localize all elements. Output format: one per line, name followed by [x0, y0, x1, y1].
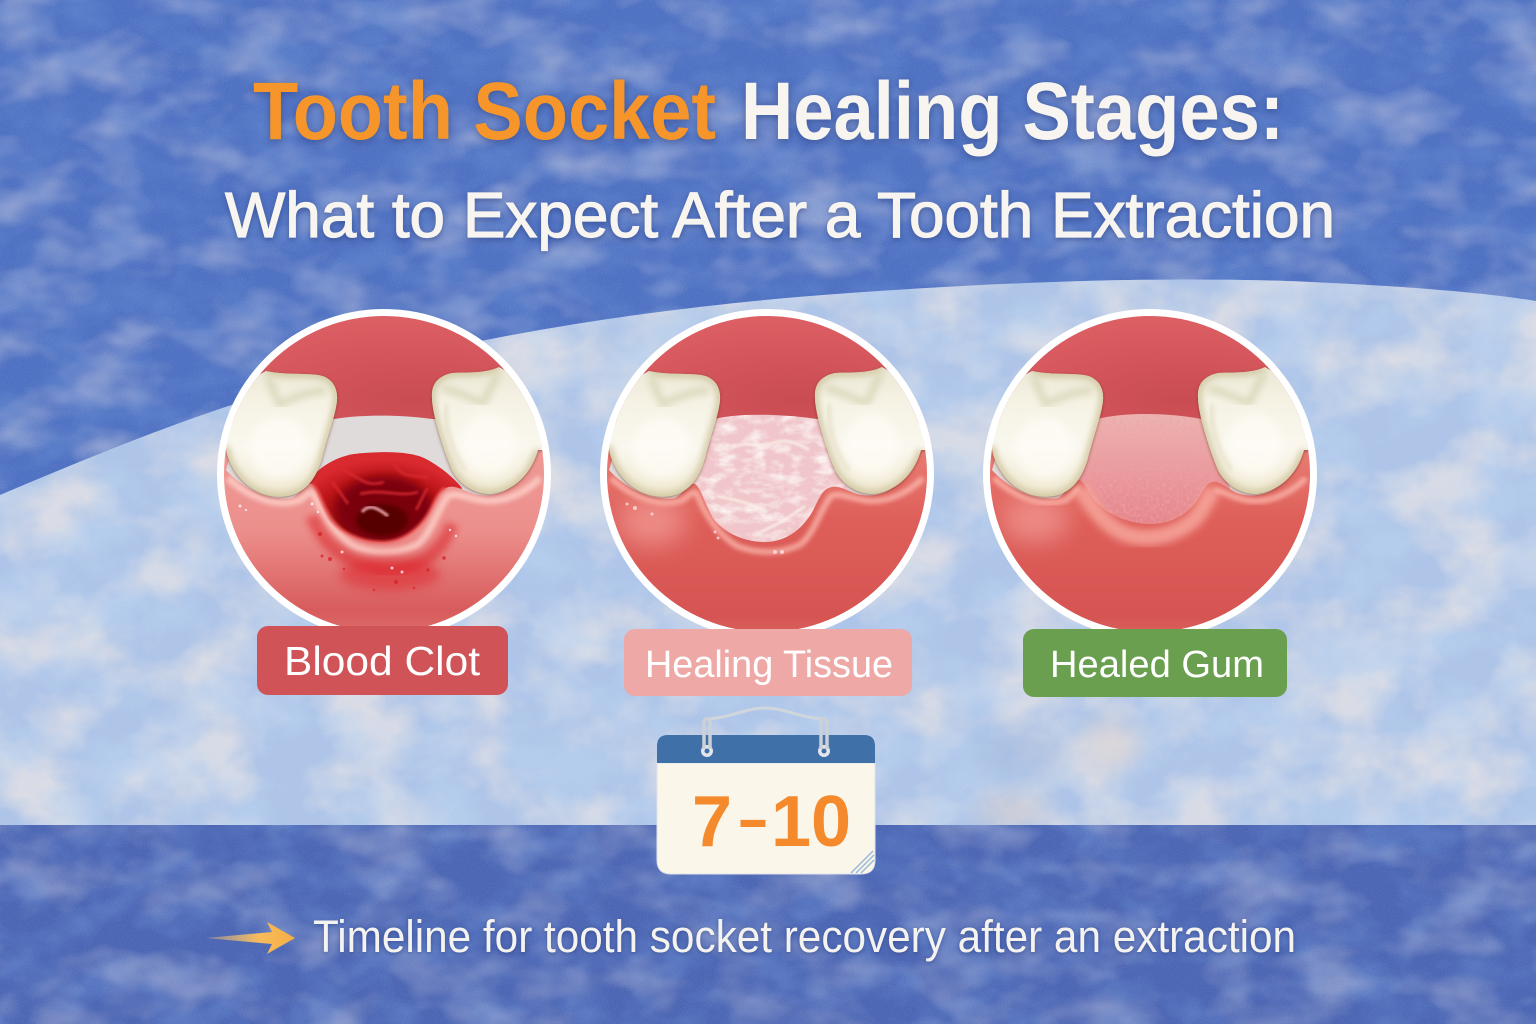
- calendar number: [692, 779, 851, 862]
- healed pink tissue: [1078, 414, 1230, 524]
- calendar rings: [701, 708, 830, 757]
- calendar page: [657, 763, 875, 874]
- lower gum: [990, 442, 1310, 629]
- calendar header: [657, 735, 875, 763]
- label: Healed Gum: [1023, 629, 1287, 697]
- label: Blood Clot: Blood Clot: [284, 638, 481, 684]
- lower gum: [224, 442, 544, 626]
- calendar number: –: [739, 779, 767, 859]
- title: white part: Healing Stages:: [741, 66, 1284, 157]
- illustration: healed socket: [990, 316, 1310, 629]
- subtitle: What to Expect After a Tooth Extraction: [225, 179, 1335, 251]
- healing tissue: [692, 414, 848, 542]
- background: pale wave band: [0, 280, 1536, 825]
- lower gum: [607, 442, 927, 629]
- illustration: socket with healing tissue: [607, 316, 927, 629]
- panel: blood clot stage: [217, 309, 551, 626]
- icon: calendar 7-10 days: [657, 708, 875, 874]
- circle: white frame: [217, 309, 551, 639]
- panel: healed gum stage: [983, 309, 1317, 629]
- background: bottom dark band: [0, 825, 1536, 1024]
- label: Healing Tissue: Healing Tissue: [645, 644, 893, 686]
- circle: white frame: [983, 309, 1317, 639]
- label: Healed Gum: Healed Gum: [1050, 644, 1264, 686]
- panel: healing tissue stage: [600, 309, 934, 629]
- page curl: [851, 851, 874, 873]
- calendar number: 10: [771, 782, 851, 862]
- arrow: [206, 922, 295, 954]
- label: Healing Tissue: [624, 629, 912, 696]
- illustration: socket with blood clot: [224, 316, 544, 626]
- label: Blood Clot: [257, 626, 508, 695]
- calendar number: 7: [692, 782, 732, 862]
- footer caption: Timeline for tooth socket recovery after an extraction: [313, 911, 1296, 962]
- title: [253, 66, 1284, 157]
- circle: white frame: [600, 309, 934, 639]
- title: orange part: Tooth Socket: [253, 66, 716, 157]
- blood clot in socket: [308, 452, 462, 542]
